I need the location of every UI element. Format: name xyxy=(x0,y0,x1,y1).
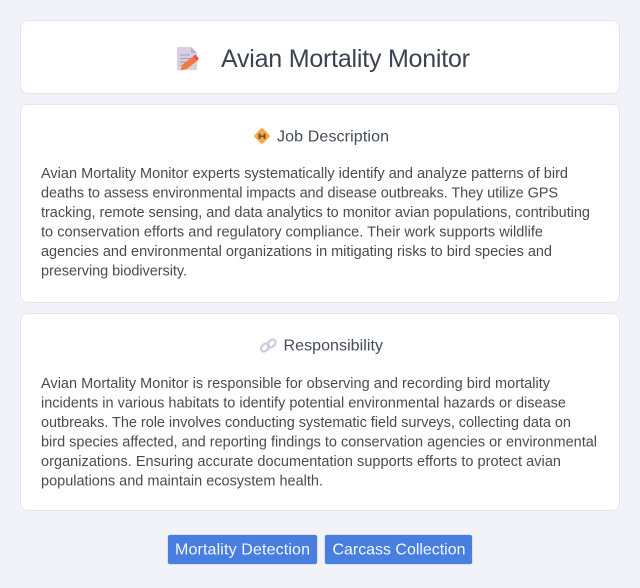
icon: memo with pencil xyxy=(177,47,199,70)
tag: carcass collection xyxy=(324,534,472,564)
icon: link xyxy=(260,338,277,353)
responsibility text: outbreaks. The role involves conducting systematic field surveys, collecting data on xyxy=(41,415,571,431)
responsibility text: Avian Mortality Monitor is responsible for observing and recording bird mortality xyxy=(41,376,551,392)
job description text: agencies and environmental organizations in mitigating risks to bird species and xyxy=(41,244,552,260)
panel: responsibility xyxy=(20,314,620,510)
heading: job description: Job Description xyxy=(277,128,389,146)
responsibility text xyxy=(41,376,597,490)
responsibility text: incidents in various habitats to identify potential environmental hazards or disease xyxy=(41,396,566,412)
tag: carcass collection: Carcass Collection xyxy=(332,542,466,558)
tag: mortality detection: Mortality Detection xyxy=(175,542,310,558)
icon: orange diamond sign xyxy=(254,128,270,144)
responsibility text: bird species affected, and reporting findings to conservation agencies or environmental xyxy=(41,434,597,450)
tag: mortality detection xyxy=(168,534,318,564)
heading: responsibility: Responsibility xyxy=(284,338,383,354)
job description text xyxy=(41,166,590,280)
job description text: Avian Mortality Monitor experts systematically identify and analyze patterns of bird xyxy=(41,166,568,182)
panel: title xyxy=(20,20,620,94)
responsibility text: populations and maintain ecosystem health. xyxy=(41,474,323,490)
title text: Avian Mortality Monitor xyxy=(221,45,470,73)
job description text: preserving biodiversity. xyxy=(41,264,187,280)
job description text: deaths to assess environmental impacts and disease outbreaks. They utilize GPS xyxy=(41,186,558,202)
responsibility text: organizations. Ensuring accurate documentation supports efforts to protect avian xyxy=(41,454,561,470)
job description text: to conservation efforts and regulatory compliance. Their work supports wildlife xyxy=(41,224,543,240)
job description text: tracking, remote sensing, and data analytics to monitor avian populations, contributing xyxy=(41,205,590,221)
panel: job description xyxy=(20,104,620,302)
